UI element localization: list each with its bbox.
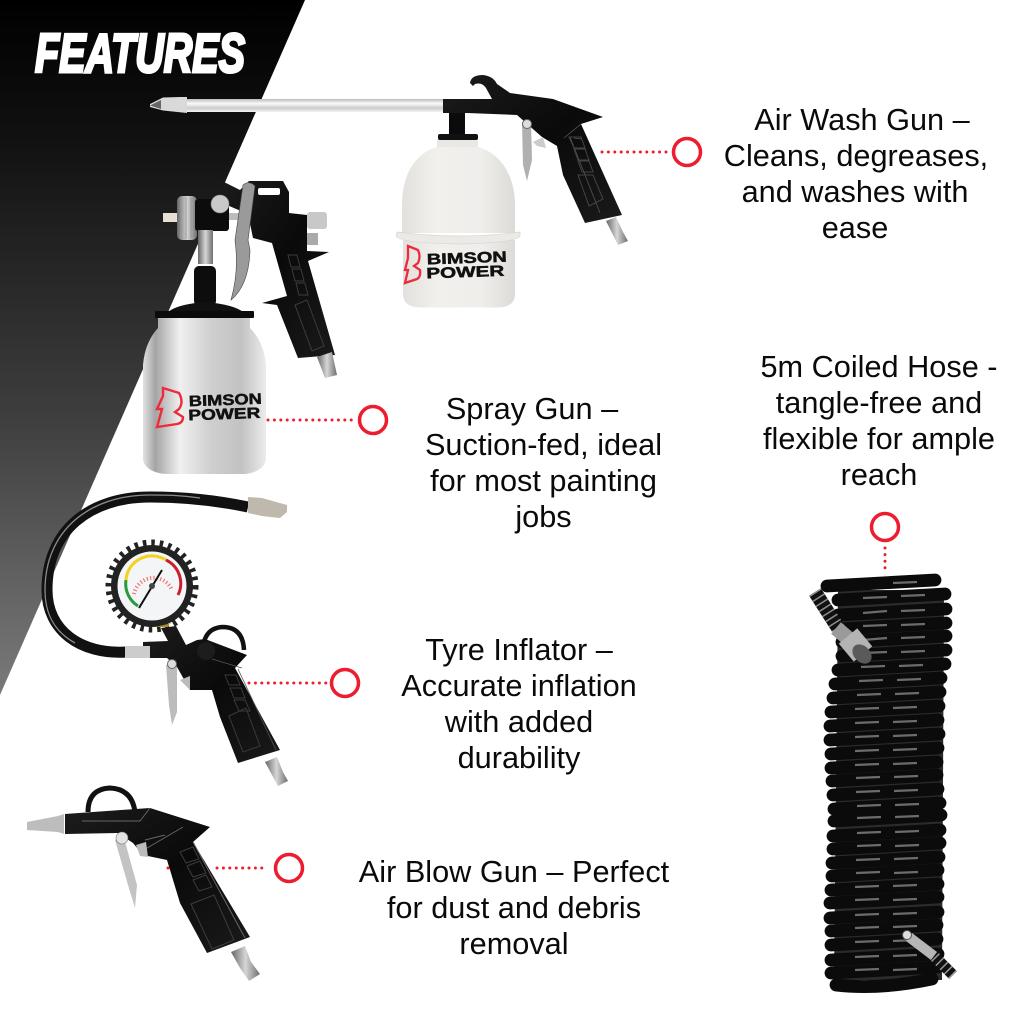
text: tyre inflator: Tyre Inflator – [425,632,614,667]
text: spray gun: for most painting [430,463,657,498]
text: air blow gun: for dust and debris [387,890,641,925]
callout: coiled hose [872,514,898,573]
blow gun ring [88,788,135,812]
inflator hose end fitting [248,497,287,518]
hose top connector [815,592,875,667]
blow gun body [65,808,250,953]
spray can logo [157,388,263,427]
text: coiled hose: flexible for ample [763,421,995,456]
product: spray gun [143,181,337,474]
text: coiled hose: tangle-free and [776,385,982,420]
text: air blow gun: removal [459,926,569,961]
coil highlights [855,582,925,970]
blow gun connector [231,946,260,981]
text: air wash gun: Cleans, degreases, [724,138,988,173]
product: coiled hose [815,580,953,987]
wash bottle logo [405,246,508,283]
background: dark diagonal panel [0,0,305,695]
text: spray gun: Spray Gun – [446,391,619,426]
blow gun nozzle [27,814,64,834]
wash bottle [396,139,520,308]
text: air blow gun: Air Blow Gun – Perfect [359,854,670,889]
callout: spray gun [268,406,386,434]
callout: tyre inflator [249,670,358,696]
callout: air wash gun [602,138,700,166]
text: air blow gun [359,854,670,961]
text: spray gun: jobs [514,499,572,534]
text: air wash gun [724,102,988,245]
title: FEATURES [35,22,245,84]
text: tyre inflator [401,632,637,775]
callout: air blow gun [166,854,302,882]
text: coiled hose: 5m Coiled Hose - [760,349,998,384]
inflator body [125,626,280,763]
spray gun head [163,195,251,306]
inflator connector [265,757,288,786]
blow gun trigger [115,832,148,908]
wash gun tube [150,97,446,113]
inflator hose [45,495,248,652]
wash gun connector [606,217,628,245]
wash gun trigger [522,120,546,181]
text: tyre inflator: durability [458,740,581,775]
wash gun body [438,75,622,223]
text: air wash gun: and washes with [742,174,968,209]
text: spray gun: Suction-fed, ideal [425,427,662,462]
product: tyre inflator [45,495,288,786]
spray can [143,302,266,474]
text: tyre inflator: Accurate inflation [401,668,637,703]
spray gun trigger [231,183,255,300]
text: air wash gun: ease [822,210,888,245]
spray can logo: BIMSON [189,391,262,410]
inflator trigger [166,660,190,725]
spray can logo: POWER [188,405,261,424]
spray gun connector [317,352,337,378]
hose bottom connector [902,930,953,975]
text: coiled hose: reach [841,457,917,492]
product: air blow gun [27,788,260,981]
product: air wash gun [150,75,628,308]
coil backing [834,590,944,980]
wash bottle logo: POWER [426,263,505,282]
text: spray gun [425,391,662,534]
spray gun back knobs [307,212,327,245]
wash bottle logo: BIMSON [427,249,507,268]
text: air wash gun: Air Wash Gun – [754,102,971,137]
spray gun handle [215,181,335,358]
inflator gauge [109,543,195,629]
text: coiled hose [760,349,998,492]
coil rings [827,580,946,987]
text: tyre inflator: with added [444,704,593,739]
